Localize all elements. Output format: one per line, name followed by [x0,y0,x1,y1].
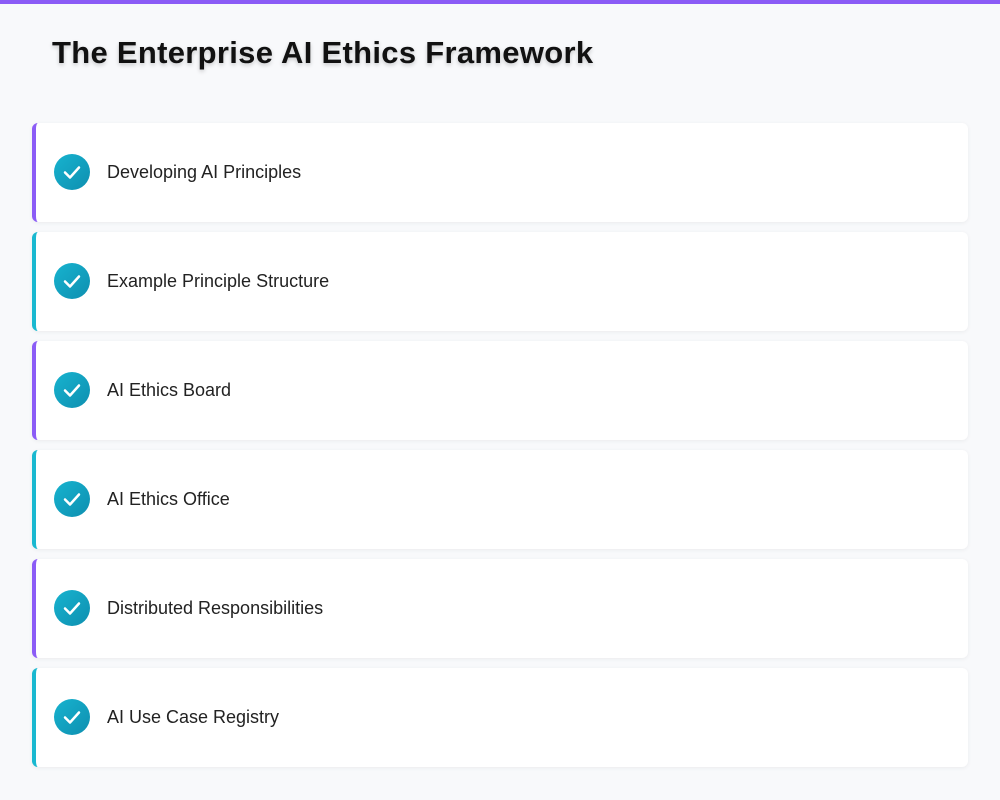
card: Distributed Responsibilities [32,559,968,658]
card: AI Use Case Registry: AI Use Case Registry [107,707,279,727]
icon: check [54,481,90,517]
icon: check [54,699,90,735]
card: AI Ethics Office: AI Ethics Office [107,489,230,509]
card: AI Ethics Board [32,341,968,440]
card: Distributed Responsibilities: Distributed Responsibilities [107,598,323,618]
card: AI Use Case Registry [32,668,968,767]
card: Developing AI Principles [32,123,968,222]
title: The Enterprise AI Ethics Framework [52,35,593,70]
card: AI Ethics Office [32,450,968,549]
icon: check [54,590,90,626]
card: Developing AI Principles: Developing AI Principles [107,162,301,182]
icon: check [54,263,90,299]
icon: check [54,372,90,408]
card: AI Ethics Board: AI Ethics Board [107,380,231,400]
card: Example Principle Structure [32,232,968,331]
icon: check [54,154,90,190]
card: Example Principle Structure: Example Principle Structure [107,271,329,291]
